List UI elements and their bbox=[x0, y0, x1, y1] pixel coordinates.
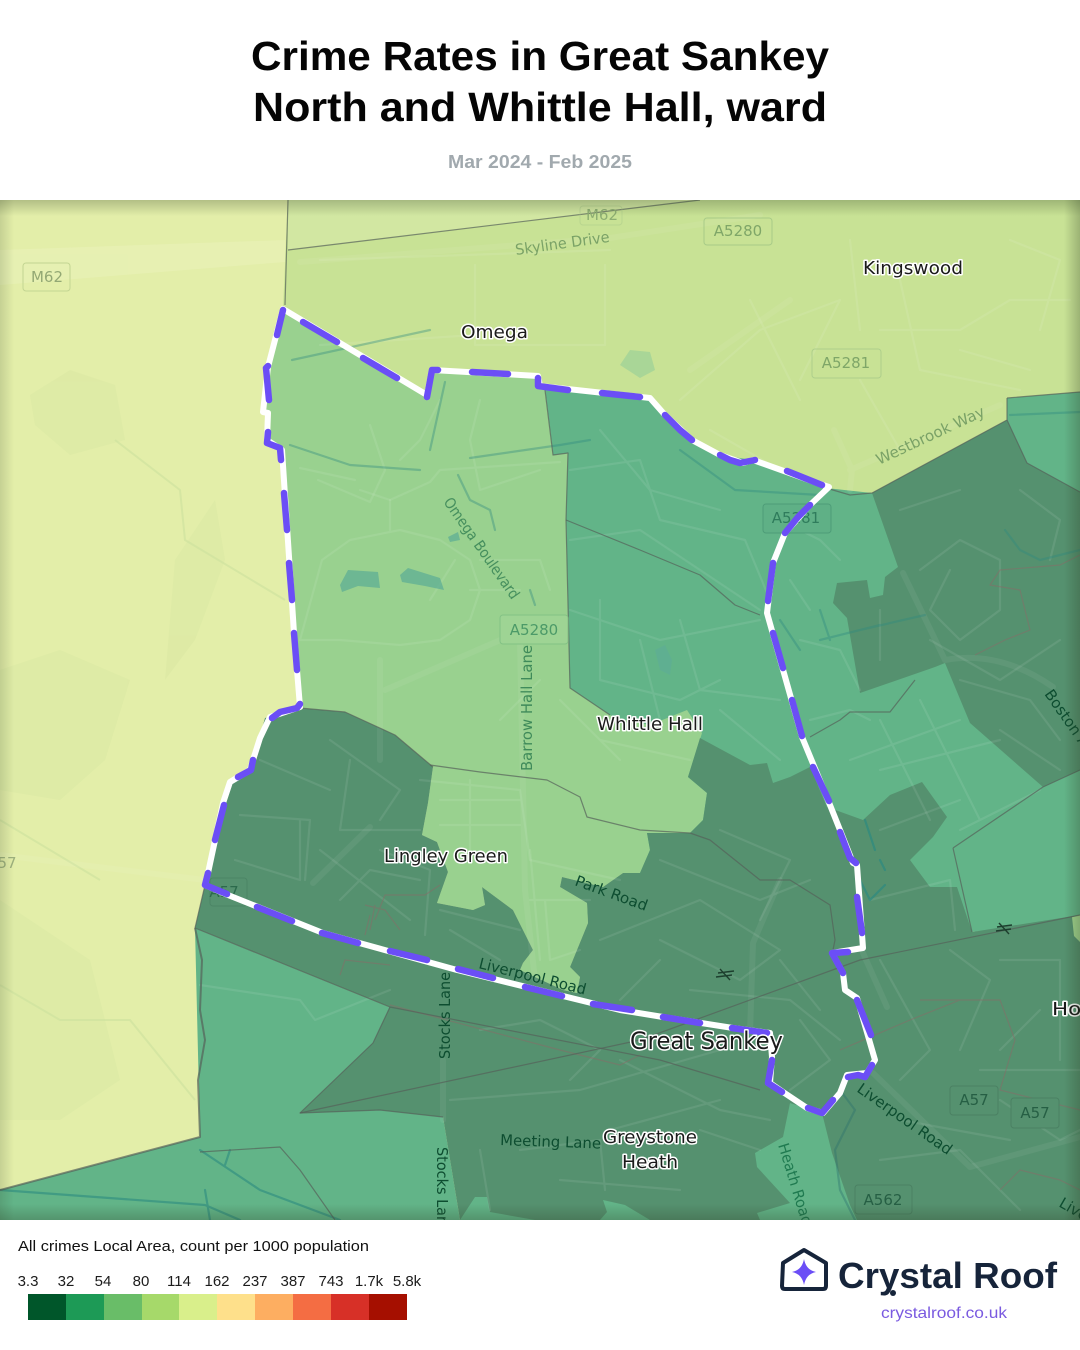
legend tick labels: 162 bbox=[204, 1273, 230, 1290]
shield: A57 east: A57 bbox=[1020, 1104, 1050, 1122]
map area: small patches at the south edge bbox=[460, 915, 1080, 1220]
map labels: road shields bbox=[0, 206, 1059, 1214]
legend tick labels bbox=[18, 1273, 422, 1290]
wordmark: Crystal Roof bbox=[838, 1255, 1058, 1296]
shield: A57 west: A57 bbox=[209, 883, 239, 901]
road label: Skyline Drive: Skyline Drive bbox=[514, 228, 611, 259]
map area: ward north-west light-green zone bbox=[265, 308, 707, 993]
map detail: ponds bbox=[340, 350, 672, 675]
map area: outer low-crime zone bbox=[0, 200, 1080, 1220]
shield: A5281 north: A5281 bbox=[822, 354, 870, 372]
choropleth map bbox=[0, 200, 1080, 1244]
legend tick labels: 114 bbox=[167, 1273, 191, 1290]
place label: Kingswood: Kingswood bbox=[863, 258, 963, 279]
road label: Meeting Lane: Meeting Lane bbox=[500, 1131, 601, 1153]
map area: high-crime dark zone south bbox=[195, 708, 1080, 1220]
map labels: road names bbox=[433, 228, 1080, 1244]
legend tick labels: 54 bbox=[95, 1273, 111, 1290]
shield: M62 north: M62 bbox=[586, 206, 618, 224]
place label: Heath: Heath bbox=[622, 1152, 678, 1173]
road label: Heath Road: Heath Road bbox=[774, 1141, 816, 1227]
map detail: faint fields on the west side bbox=[5, 240, 285, 284]
road label: Stocks Lane north: Stocks Lane bbox=[436, 972, 454, 1059]
road label: Omega Boulevard: Omega Boulevard bbox=[440, 494, 523, 603]
road label: Barrow Hall Lane: Barrow Hall Lane bbox=[518, 645, 536, 771]
road label: Liverpool Road: Liverpool Road bbox=[854, 1080, 956, 1159]
map detail: minor streets bbox=[200, 240, 1080, 1210]
shield: A57 east bbox=[1011, 1098, 1059, 1128]
shield: A5280 in ward bbox=[500, 615, 568, 644]
map area: high-crime dark zone east bbox=[833, 420, 1080, 787]
subtitle: date range: Mar 2024 - Feb 2025 bbox=[448, 152, 632, 172]
legend tick labels: 1.7k bbox=[355, 1273, 384, 1290]
shield: A562: A562 bbox=[864, 1191, 902, 1209]
ward boundary: white base line bbox=[205, 309, 875, 1113]
legend tick labels: 743 bbox=[318, 1273, 344, 1290]
title: North and Whittle Hall, ward bbox=[253, 84, 827, 130]
road label: Park Road: Park Road bbox=[573, 872, 650, 915]
title: Crime Rates in Great Sankey bbox=[251, 33, 829, 79]
shield: M62 west: M62 bbox=[31, 268, 63, 286]
map detail: thin zone borders bbox=[0, 200, 1080, 1220]
legend tick labels: 237 bbox=[242, 1273, 268, 1290]
wordmark key dot under the y bbox=[890, 1290, 896, 1296]
east dark-zone streets bbox=[880, 490, 1060, 770]
website link: crystalroof.co.uk bbox=[881, 1305, 1008, 1322]
place label: Lingley Green: Lingley Green bbox=[384, 846, 508, 867]
legend title: All crimes Local Area, count per 1000 population bbox=[18, 1238, 369, 1255]
legend bbox=[18, 1238, 422, 1320]
place label: Whittle Hall: Whittle Hall bbox=[597, 714, 703, 735]
map detail: main roads bbox=[310, 490, 1074, 1170]
shield: A57: A57 bbox=[959, 1091, 989, 1109]
shield: A5280 in ward: A5280 bbox=[510, 621, 558, 639]
map area: Heath Road green wedge bbox=[755, 1103, 857, 1220]
central ward streets bbox=[570, 430, 780, 760]
ward boundary: purple dashes bbox=[205, 310, 872, 1113]
shield: A5280 north: A5280 bbox=[714, 222, 762, 240]
legend tick labels: 5.8k bbox=[393, 1273, 422, 1290]
title bbox=[251, 33, 829, 130]
road label: Westbrook Way: Westbrook Way bbox=[873, 402, 988, 469]
legend tick labels: 387 bbox=[280, 1273, 306, 1290]
icon: house with star bbox=[782, 1250, 826, 1289]
place label: Great Sankey: Great Sankey bbox=[630, 1027, 783, 1055]
railway station symbols bbox=[716, 923, 1012, 980]
shield: A5281 at boundary bbox=[763, 504, 831, 533]
map detail: admin boundaries bbox=[340, 555, 1080, 1190]
map edge vignette bbox=[0, 200, 1080, 1220]
map detail: faint lanes on the west side bbox=[0, 440, 285, 1100]
legend tick labels: 3.3 bbox=[18, 1273, 38, 1290]
legend colour scale bbox=[28, 1294, 407, 1320]
north-zone streets bbox=[320, 240, 1070, 470]
road label: Liverpool Road under boundary: Liverpool Road bbox=[477, 954, 588, 998]
place label: Greystone: Greystone bbox=[603, 1127, 697, 1148]
map area: northern zone bbox=[283, 200, 1080, 495]
south-west dark-zone streets bbox=[235, 740, 520, 960]
map detail: waterways bbox=[0, 330, 1080, 1220]
place label: Omega: Omega bbox=[461, 322, 528, 343]
logo: Crystal Roof bbox=[782, 1250, 1058, 1322]
shield: A5280 north bbox=[704, 218, 772, 245]
shield: A57 west bbox=[209, 878, 247, 906]
legend tick labels: 80 bbox=[133, 1273, 149, 1290]
map labels: place names bbox=[384, 258, 1080, 1173]
road label: Stocks Lane south: Stocks Lane bbox=[433, 1147, 451, 1234]
shield: M62 west bbox=[23, 263, 70, 291]
shield: A562 bbox=[855, 1185, 912, 1214]
south-east dark-zone streets bbox=[600, 830, 840, 1090]
legend tick labels: 32 bbox=[58, 1273, 74, 1290]
shield: A5281 north bbox=[812, 349, 881, 378]
shield: A5281 at boundary: A5281 bbox=[772, 509, 820, 527]
map area: mid-green zones bbox=[0, 389, 1080, 1220]
west ward streets bbox=[300, 400, 560, 502]
shield: A57 bbox=[950, 1086, 998, 1115]
